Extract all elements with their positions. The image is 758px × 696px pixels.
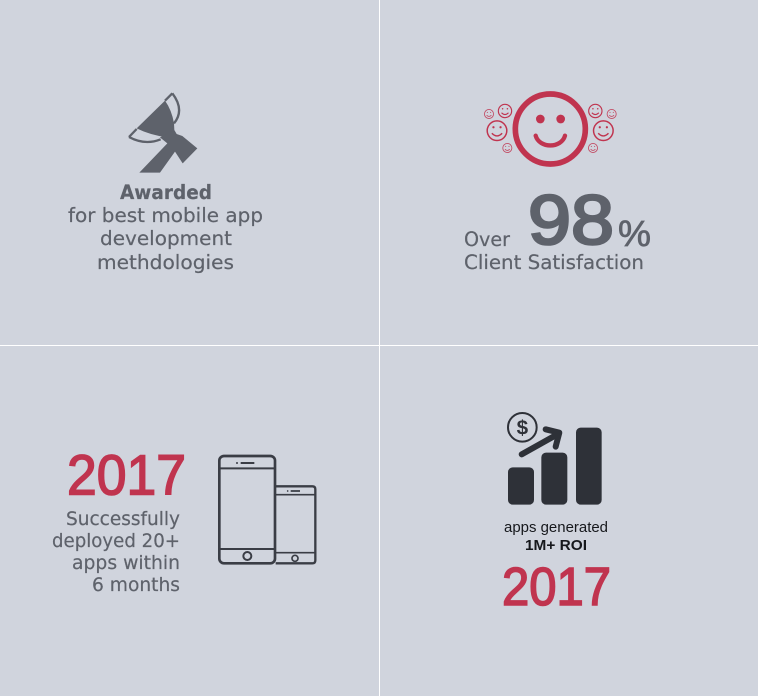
stat: 2017: 2017 (502, 557, 611, 617)
text: deployment description: deployed 20+ (52, 530, 180, 552)
stat: 98 percent (528, 181, 651, 259)
text: roi description (504, 519, 608, 554)
text: deployment description: 6 months (92, 574, 180, 596)
stat: 2017: 2017 (67, 444, 186, 508)
text: deployment description (52, 508, 180, 596)
text: award description: for best mobile app (68, 204, 263, 227)
text: deployment description: Successfully (66, 508, 180, 530)
stat: 98 percent: 98 (528, 181, 614, 259)
stat: 98 percent: % (618, 213, 651, 254)
icon: phones (219, 456, 315, 563)
text: roi description: apps generated (504, 519, 608, 536)
text: award description (68, 204, 263, 274)
text: client satisfaction: Client Satisfaction (464, 251, 644, 274)
panel: client satisfaction (464, 94, 651, 274)
text: over: Over (464, 228, 511, 251)
icon: trophy (129, 93, 197, 173)
icon: growth chart (508, 413, 602, 505)
panel: roi (502, 413, 611, 617)
heading: awarded: Awarded (120, 181, 212, 204)
icon: smileys (484, 94, 616, 164)
panel: apps deployed (52, 444, 315, 596)
text: deployment description: apps within (72, 552, 180, 574)
text: award description: development (100, 227, 232, 250)
text: award description: methdologies (97, 251, 234, 274)
text: roi description: 1M+ ROI (525, 537, 587, 554)
icon: growth chart: $ (517, 417, 529, 440)
panel: awarded (68, 93, 263, 274)
